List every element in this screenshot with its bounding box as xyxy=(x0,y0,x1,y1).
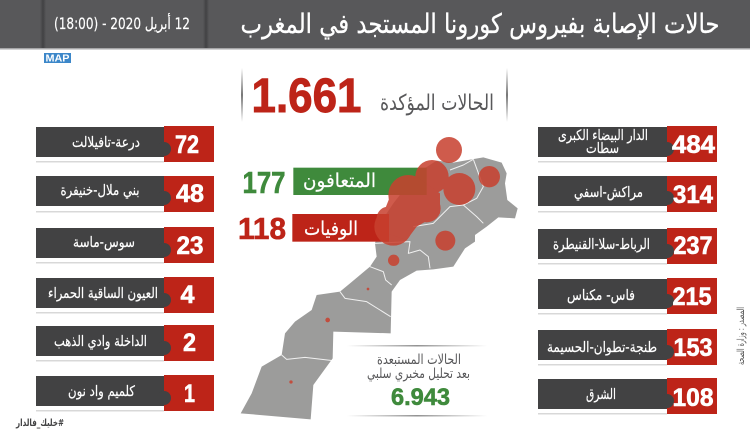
recovered count: 177 xyxy=(242,165,286,200)
row: Casablanca-Settat: سطات xyxy=(586,141,619,157)
map of Morocco with case bubbles xyxy=(241,137,518,419)
row: Souss-Massa: سوس-ماسة xyxy=(73,235,135,251)
row: Laayoune-Sakia El Hamra: 4 xyxy=(180,281,195,309)
row: Tanger-Tetouan-Al Hoceima: طنجة-تطوان-الحسيمة xyxy=(547,340,657,356)
red bar xyxy=(292,214,389,242)
row: Guelmim-Oued Noun: 1 xyxy=(184,380,195,408)
confirmed total: 1.661 xyxy=(252,70,362,123)
row: Laayoune-Sakia El Hamra xyxy=(36,277,214,314)
row: Dakhla-Oued Ed-Dahab xyxy=(36,325,214,362)
excluded cases block xyxy=(347,345,487,416)
confirmed label: الحالات المؤكدة xyxy=(380,91,494,116)
row: Souss-Massa: 23 xyxy=(176,232,204,260)
row: Oriental: 108 xyxy=(672,384,714,412)
row: Draa-Tafilalet: 72 xyxy=(175,131,199,159)
row: Rabat-Sale-Kenitra xyxy=(538,228,717,264)
row: Rabat-Sale-Kenitra: 237 xyxy=(674,232,712,260)
row: Marrakech-Safi: مراكش-اسفي xyxy=(574,185,643,201)
row: Fes-Meknes: فاس- مكناس xyxy=(567,288,635,304)
region borders xyxy=(282,159,483,361)
header band xyxy=(0,0,750,50)
row: Rabat-Sale-Kenitra: الرباط-سلا-القنيطرة xyxy=(553,237,650,253)
row: Dakhla-Oued Ed-Dahab: 2 xyxy=(183,329,196,357)
row: Guelmim-Oued Noun: كلميم واد نون xyxy=(68,384,135,400)
left column: regions xyxy=(36,126,214,412)
deaths count: 118 xyxy=(238,211,286,246)
map silhouette xyxy=(241,157,518,419)
date: 12 أبريل 2020 - (18:00) xyxy=(54,13,190,34)
row: Dakhla-Oued Ed-Dahab: الداخلة وادي الذهب xyxy=(54,334,147,350)
row: Draa-Tafilalet xyxy=(36,126,214,162)
row: Beni Mellal-Khenifra xyxy=(36,176,214,212)
row: Marrakech-Safi: 314 xyxy=(673,181,713,209)
excluded label: الحالات المستبعدة xyxy=(377,352,461,368)
row: Oriental: الشرق xyxy=(586,387,616,403)
row: Oriental xyxy=(538,378,717,414)
recovered label: المتعافون xyxy=(303,170,376,192)
row: Beni Mellal-Khenifra: بني ملال-خنيفرة xyxy=(60,183,140,199)
row: Casablanca-Settat: الدار البيضاء الكبرى xyxy=(558,128,648,144)
row: Laayoune-Sakia El Hamra: العيون الساقية الحمراء xyxy=(48,286,158,302)
green bar xyxy=(293,168,427,195)
row: Guelmim-Oued Noun xyxy=(36,375,214,412)
row: Casablanca-Settat xyxy=(538,126,717,162)
row: Marrakech-Safi xyxy=(538,176,717,212)
hashtag: #خليك_فالدار xyxy=(15,418,64,429)
row: Fes-Meknes: 215 xyxy=(672,283,712,311)
row: Casablanca-Settat: 484 xyxy=(672,131,715,159)
MAP logo: MAP xyxy=(46,54,70,64)
deaths label: الوفيات xyxy=(304,218,358,240)
row: Beni Mellal-Khenifra: 48 xyxy=(176,180,204,208)
bubbles xyxy=(289,137,500,384)
excluded count: 6.943 xyxy=(391,384,450,411)
row: Fes-Meknes xyxy=(538,278,717,314)
row: Tanger-Tetouan-Al Hoceima xyxy=(538,329,717,366)
row: Souss-Massa xyxy=(36,227,214,264)
row: Draa-Tafilalet: درعة-تافيلالت xyxy=(72,135,140,151)
confirmed cases panel xyxy=(241,68,508,123)
right column: regions xyxy=(538,126,717,414)
source note: المصدر : وزارة الصحة xyxy=(736,307,747,365)
excluded cases block: بعد تحليل مخبري سلبي xyxy=(367,366,470,382)
row: Tanger-Tetouan-Al Hoceima: 153 xyxy=(674,334,712,362)
